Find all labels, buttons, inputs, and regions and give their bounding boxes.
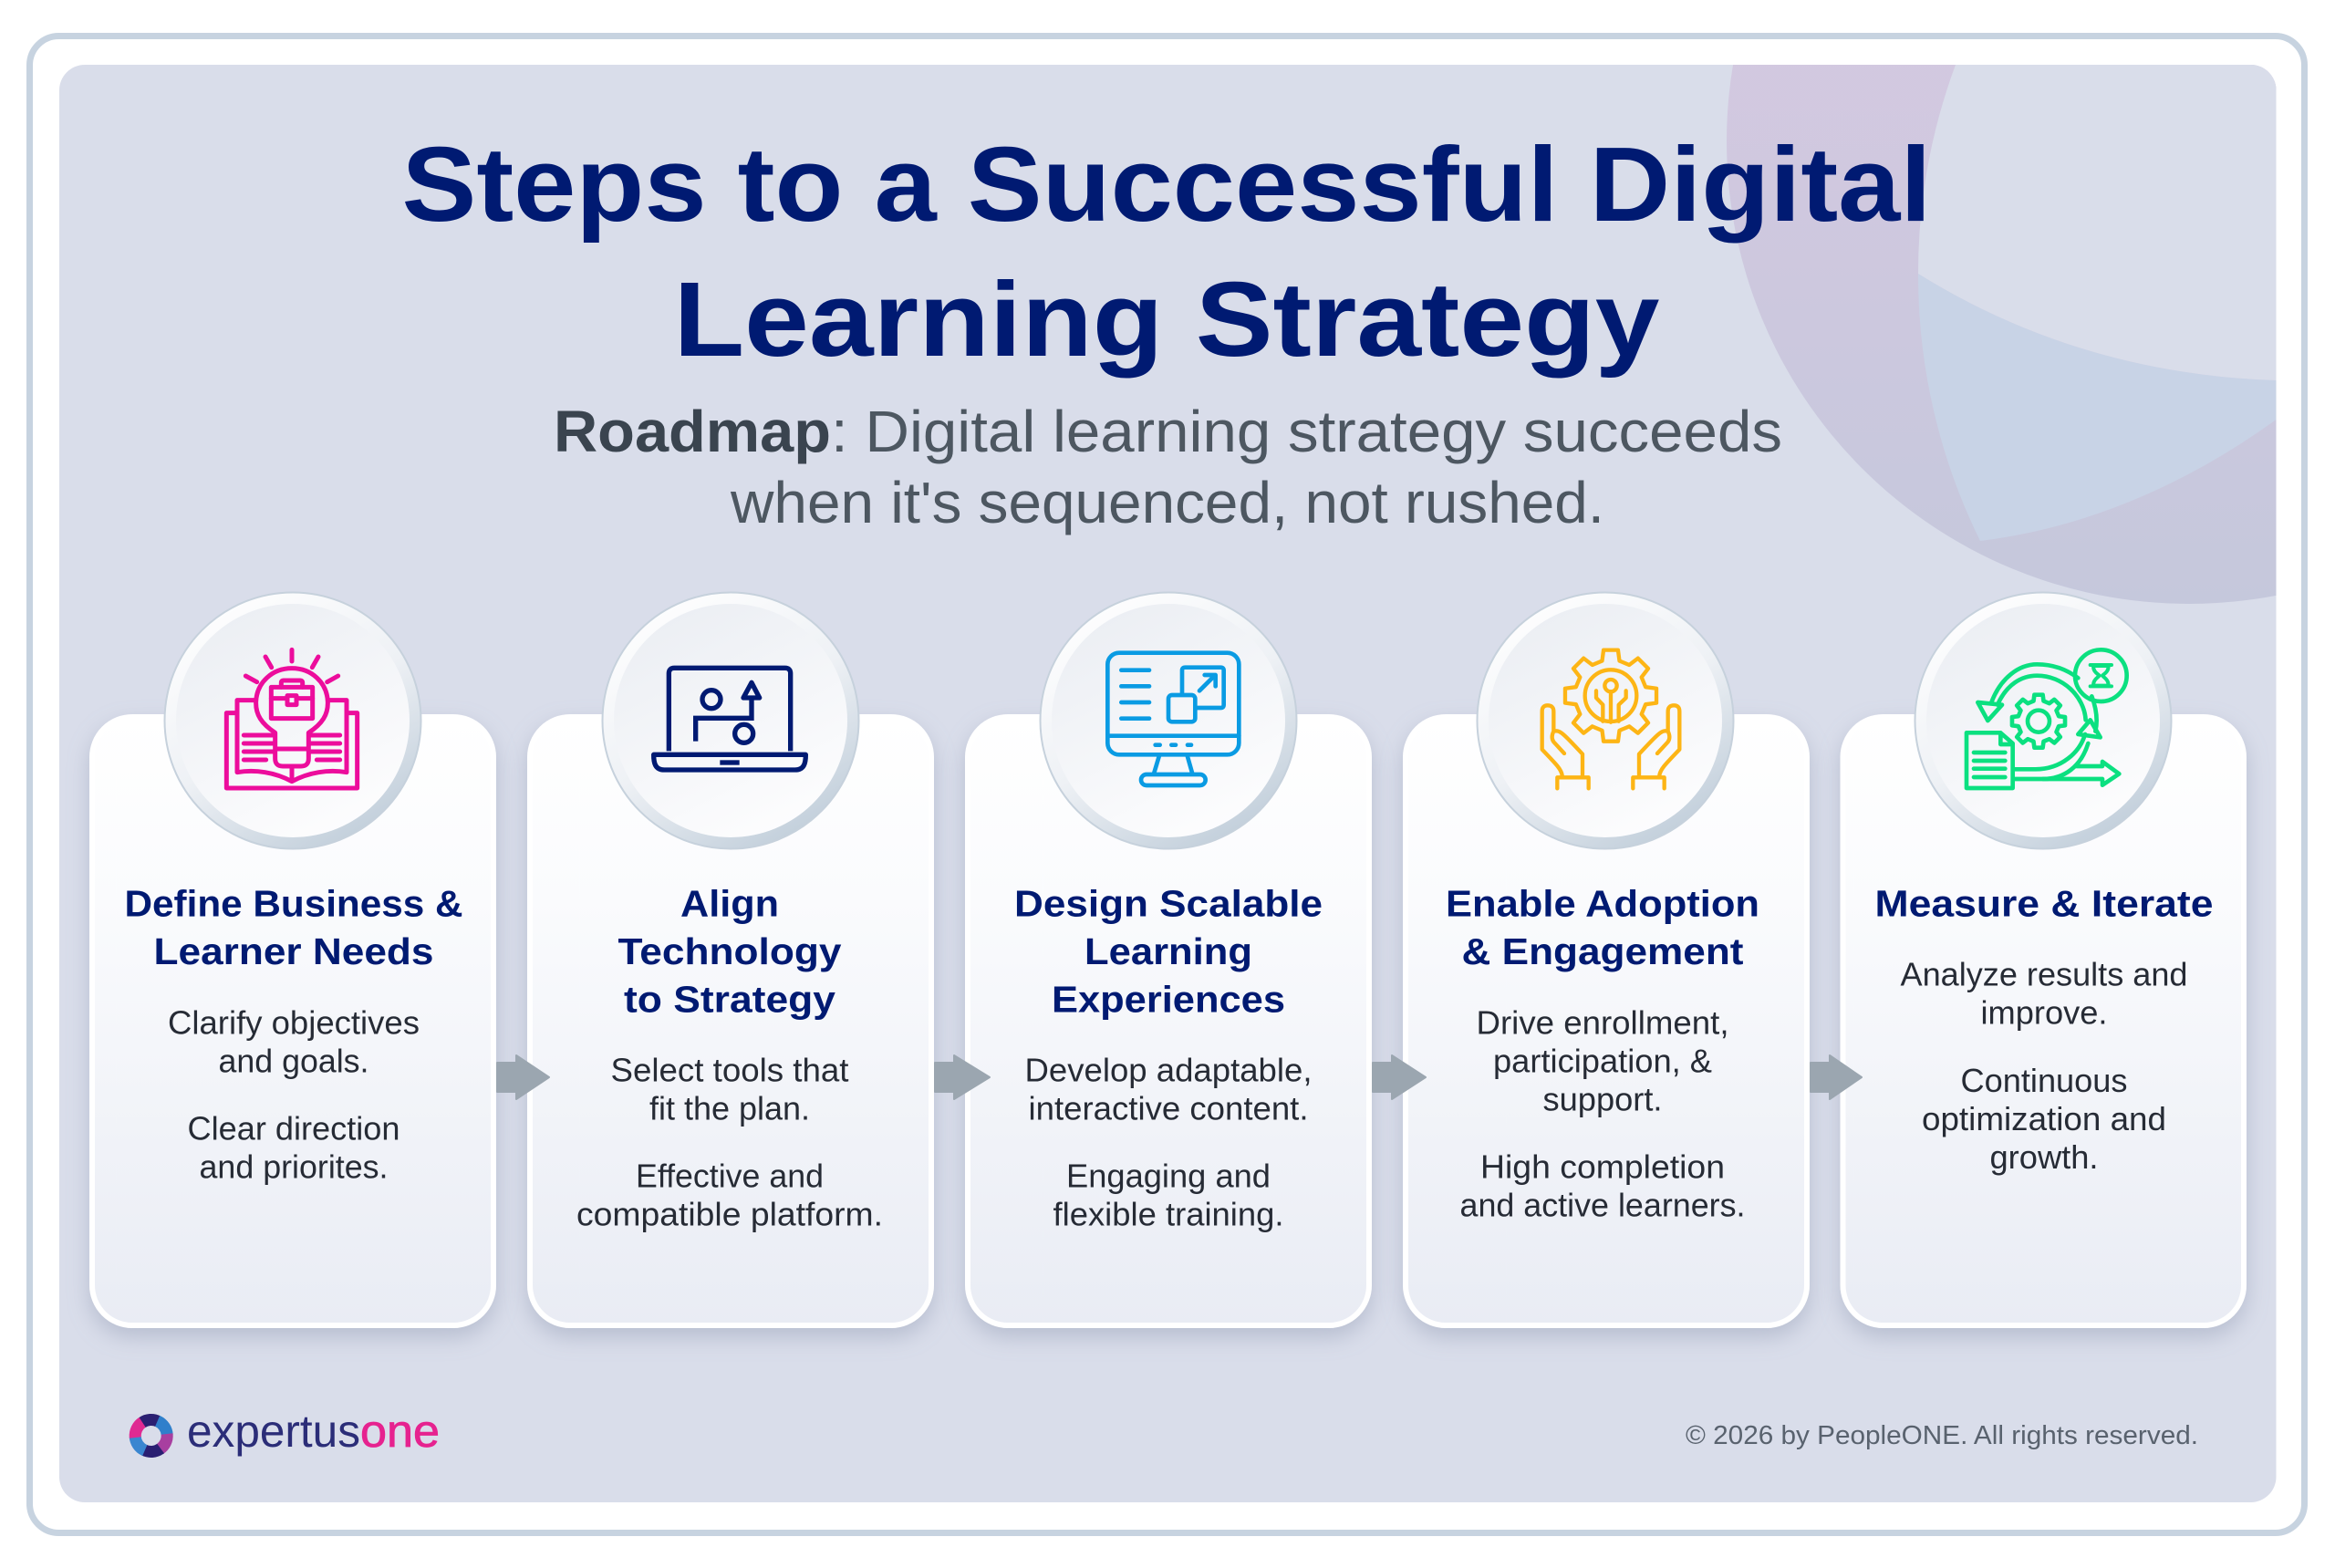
body: card 5 [1901, 956, 2187, 1176]
subtitle: when it's sequenced, not rushed. [730, 470, 1604, 535]
body: card 3: Develop adaptable, [1025, 1051, 1312, 1089]
heading: card 1: Define Business & [124, 883, 463, 925]
body: card 4: and active learners. [1459, 1186, 1746, 1224]
title [401, 125, 1932, 379]
subtitle: Roadmap [554, 399, 831, 464]
body: card 1 [168, 1003, 420, 1186]
heading: card 3: Design Scalable [1014, 883, 1323, 925]
arrow: step 1 to 2 [497, 1055, 549, 1099]
heading: card 5: Measure & Iterate [1875, 883, 2213, 925]
icon: laptop with path [654, 668, 805, 770]
panel: card 4 [1406, 717, 1807, 1325]
logo: expertusone [129, 1406, 440, 1458]
body: card 1: and priorites. [199, 1147, 389, 1186]
body: card 5: optimization and [1922, 1100, 2166, 1137]
icon: monitor with scaling squares [1107, 653, 1239, 785]
body: card 2: compatible platform. [576, 1195, 883, 1233]
heading: card 2: Technology [618, 930, 842, 972]
title: Steps to a Successful Digital [401, 125, 1932, 244]
icon: logo ring [129, 1414, 173, 1458]
icon: book and lightbulb [226, 649, 358, 788]
subtitle [554, 399, 1782, 535]
subtitle: : Digital learning strategy succeeds [831, 399, 1782, 464]
heading: card 3 [1014, 883, 1323, 1020]
body: card 5: Continuous [1961, 1062, 2127, 1099]
body: card 4: participation, & [1493, 1042, 1712, 1080]
icon: iteration cycle [1967, 649, 2127, 788]
heading: card 4 [1446, 883, 1759, 972]
body: card 5: Analyze results and [1901, 956, 2187, 992]
badge: step 2 [602, 593, 859, 848]
badge: step 3 [1040, 593, 1297, 848]
body: card 3: flexible training. [1053, 1195, 1284, 1233]
body: card 4: High completion [1480, 1147, 1725, 1186]
body: card 4 [1459, 1003, 1746, 1224]
body: card 2: fit the plan. [649, 1089, 810, 1127]
icon: hands holding gear [1542, 650, 1679, 788]
heading: card 2 [618, 883, 842, 1020]
body: card 5: improve. [1981, 994, 2107, 1031]
body: card 2: Effective and [636, 1157, 824, 1195]
body: card 1: Clear direction [188, 1109, 400, 1147]
title: Learning Strategy [673, 260, 1660, 379]
body: card 2: Select tools that [611, 1051, 848, 1089]
body: card 5: growth. [1990, 1138, 2098, 1176]
heading: card 1: Learner Needs [153, 930, 433, 972]
body: card 3 [1025, 1051, 1312, 1233]
body: card 3: Engaging and [1066, 1157, 1271, 1195]
body: card 3: interactive content. [1029, 1089, 1308, 1127]
heading: card 3: Experiences [1052, 978, 1285, 1020]
panel: card 2 [530, 717, 931, 1325]
copyright: © 2026 by PeopleONE. All rights reserved. [1686, 1421, 2198, 1450]
heading: card 4: & Engagement [1461, 930, 1744, 972]
arrow: step 3 to 4 [1373, 1055, 1426, 1099]
badge: step 5 [1915, 593, 2171, 848]
arrow: step 4 to 5 [1811, 1055, 1862, 1099]
heading: card 4: Enable Adoption [1446, 883, 1759, 925]
body: card 2 [576, 1051, 883, 1233]
badge: step 1 [164, 593, 421, 848]
badge: step 4 [1478, 593, 1733, 848]
decorative circles [1727, 65, 2277, 604]
logo: expertusone: expertus [187, 1406, 360, 1457]
body: card 4: support. [1543, 1080, 1662, 1118]
logo: expertusone: one [360, 1406, 440, 1457]
body: card 4: Drive enrollment, [1476, 1003, 1729, 1042]
heading: card 3: Learning [1084, 930, 1252, 972]
body: card 1: Clarify objectives [168, 1003, 420, 1042]
heading: card 2: Align [680, 883, 779, 925]
panel: card 3 [968, 717, 1369, 1325]
panel: card 5 [1842, 717, 2244, 1325]
heading: card 1 [124, 883, 463, 972]
arrow: step 2 to 3 [935, 1055, 990, 1099]
body: card 1: and goals. [219, 1042, 368, 1080]
heading: card 2: to Strategy [624, 978, 835, 1020]
panel: card 1 [92, 717, 493, 1325]
